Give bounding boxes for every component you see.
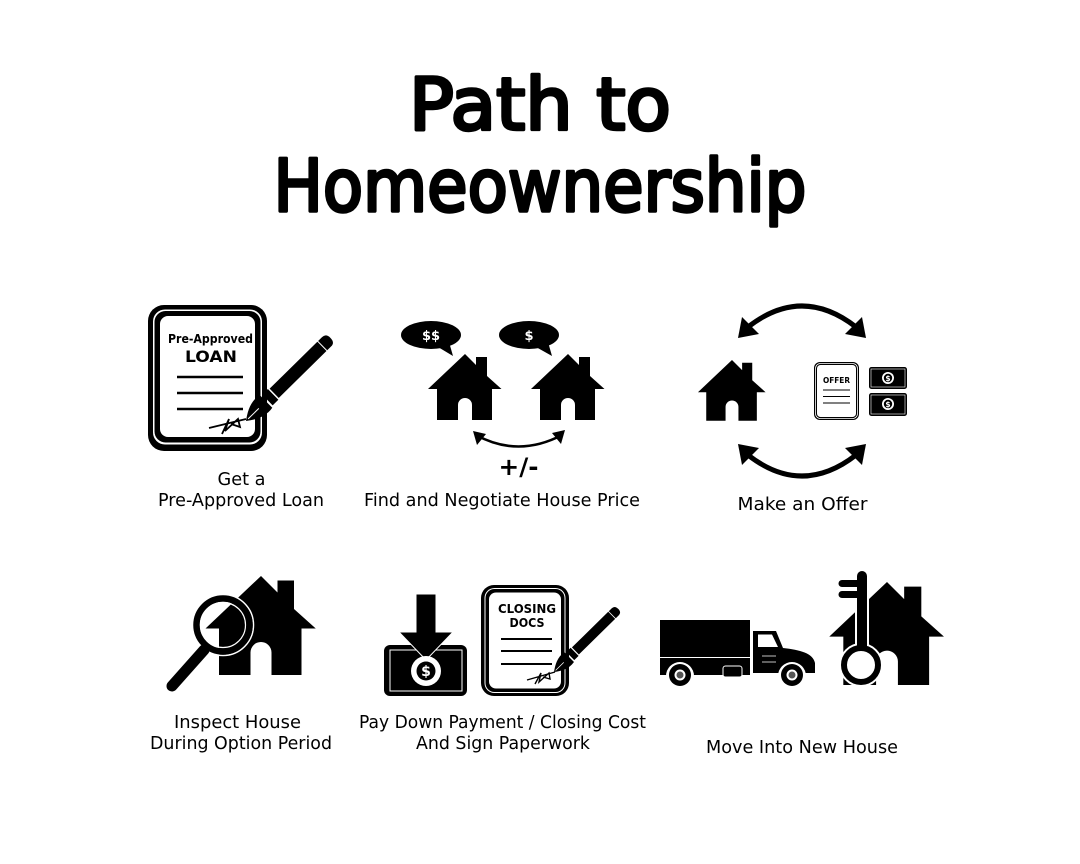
icon: two houses with price bubbles bbox=[401, 321, 604, 481]
title bbox=[274, 62, 806, 228]
label: inspect house during option period bbox=[150, 713, 332, 754]
icon: down payment: $ bbox=[421, 664, 431, 680]
icon: closing documents: CLOSING bbox=[498, 602, 556, 616]
icon: two houses with price bubbles: +/- bbox=[498, 453, 538, 481]
icon: closing documents bbox=[481, 585, 623, 696]
icon: key and new house bbox=[829, 571, 944, 685]
icon: magnifier over house bbox=[172, 576, 316, 686]
icon: house and offer exchange: $ bbox=[885, 400, 891, 409]
icon: moving truck bbox=[660, 620, 815, 690]
label: get a pre-approved loan: Get a bbox=[218, 470, 266, 490]
label: find and negotiate house price: Find and Negotiate House Price bbox=[364, 491, 640, 511]
label: inspect house during option period: Inspect House bbox=[174, 713, 301, 733]
icon: pre-approved loan document: LOAN bbox=[185, 347, 237, 366]
label: get a pre-approved loan bbox=[158, 470, 324, 511]
label: pay down payment and sign paperwork: And Sign Paperwork bbox=[416, 734, 591, 754]
icon: two houses with price bubbles: $$ bbox=[422, 329, 440, 344]
title: Homeownership bbox=[274, 144, 806, 228]
label: pay down payment and sign paperwork bbox=[359, 713, 646, 754]
icon: house and offer exchange: OFFER bbox=[823, 376, 850, 385]
icon: down payment bbox=[384, 594, 467, 696]
label: move into new house: Move Into New House bbox=[706, 738, 898, 758]
label: inspect house during option period: During Option Period bbox=[150, 734, 332, 754]
icon: two houses with price bubbles: $ bbox=[524, 329, 534, 344]
icon: pre-approved loan document: Pre-Approved bbox=[168, 332, 253, 346]
icon: pre-approved loan document bbox=[148, 305, 337, 451]
label: pay down payment and sign paperwork: Pay Down Payment / Closing Cost bbox=[359, 713, 646, 733]
title: Path to bbox=[409, 62, 671, 146]
label: get a pre-approved loan: Pre-Approved Loan bbox=[158, 491, 324, 511]
icon: house and offer exchange: $ bbox=[885, 374, 891, 383]
icon: house and offer exchange bbox=[698, 306, 907, 476]
icon: closing documents: DOCS bbox=[510, 616, 544, 630]
label: make an offer: Make an Offer bbox=[738, 495, 868, 515]
